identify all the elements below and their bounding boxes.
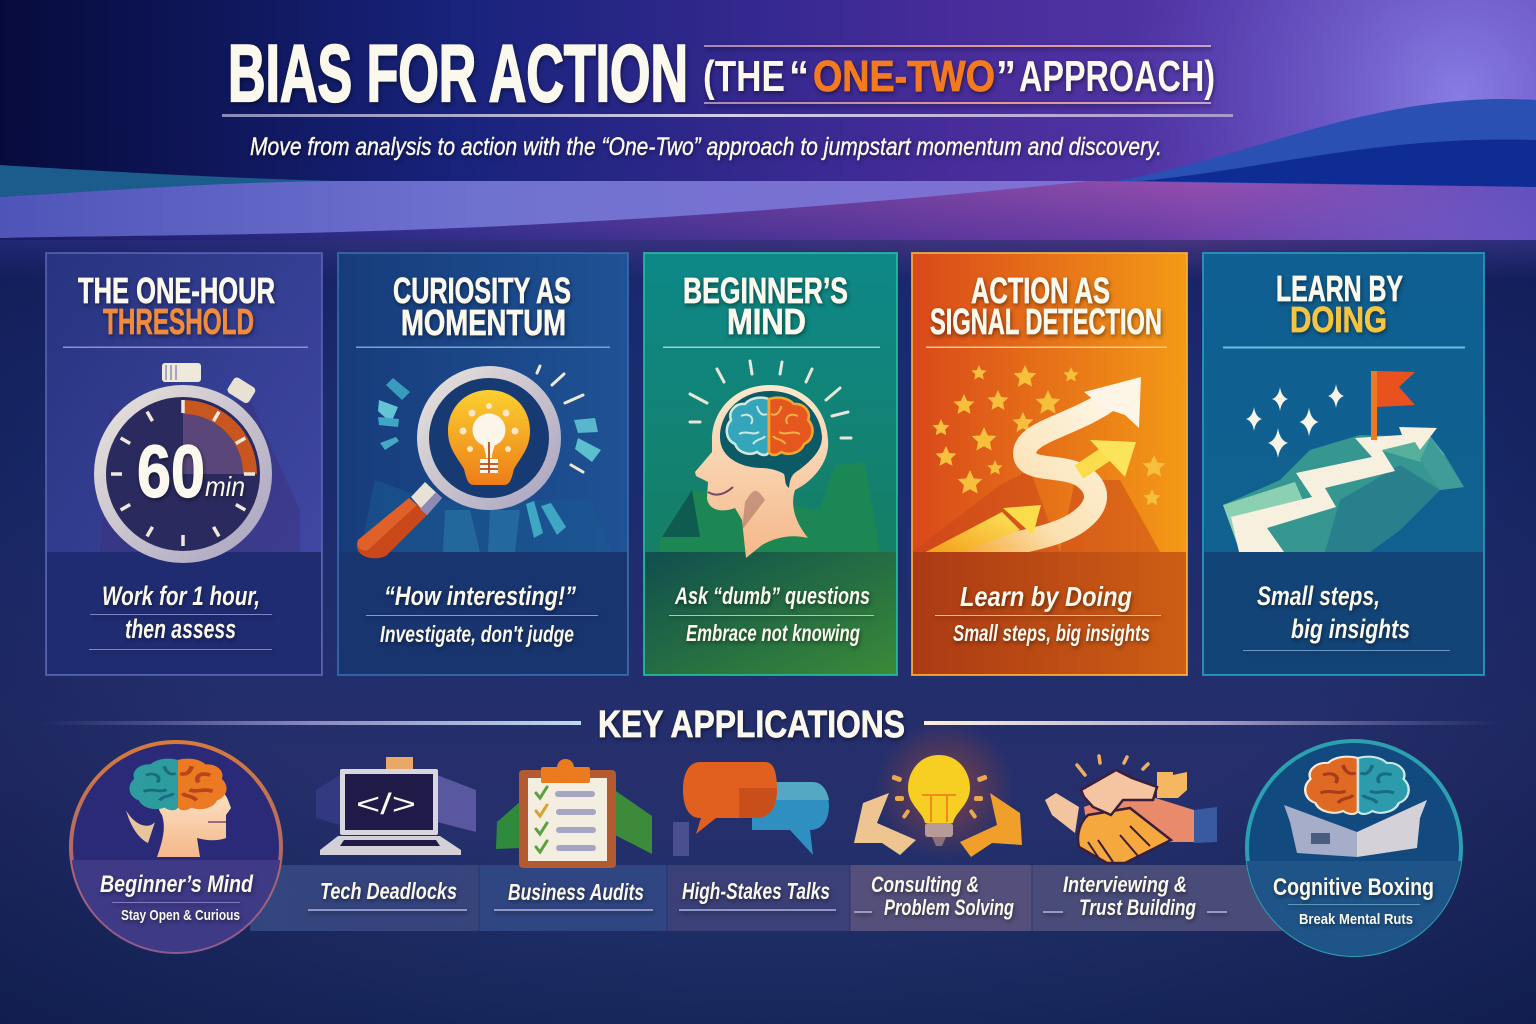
heading: DOING xyxy=(1290,299,1387,340)
caption: Learn by Doing xyxy=(960,581,1132,612)
icon: stopwatch: min xyxy=(205,471,245,502)
heading xyxy=(393,270,571,343)
heading: THE ONE-HOUR xyxy=(78,270,275,311)
icon: hands and light bulb xyxy=(854,720,1022,860)
icon: signals and rising arrows xyxy=(920,365,1165,562)
heading: BEGINNER’S xyxy=(683,270,848,311)
tagline: Move from analysis to action with the “One-Two” approach to jumpstart momentum and discovery. xyxy=(250,133,1162,161)
label: High-Stakes Talks xyxy=(682,878,830,904)
icon: mountain path and flag xyxy=(1223,371,1464,552)
icon: head with brain xyxy=(126,759,231,857)
heading: LEARN BY xyxy=(1276,268,1403,309)
application: beginner's mind badge xyxy=(68,742,284,960)
caption xyxy=(935,581,1161,646)
subtitle bracket: ONE-TWO xyxy=(813,52,995,101)
heading: CURIOSITY AS xyxy=(393,270,571,311)
label: Interviewing & xyxy=(1063,872,1187,897)
heading xyxy=(1276,268,1403,340)
caption xyxy=(89,581,272,650)
icon: magnifying glass with light bulb xyxy=(357,366,601,558)
label: Stay Open & Curious xyxy=(121,907,240,924)
application: high-stakes talks xyxy=(673,762,836,911)
caption: Embrace not knowing xyxy=(686,620,860,646)
heading: ACTION AS xyxy=(971,270,1110,311)
main heading: BIAS FOR ACTION xyxy=(228,29,688,119)
icon: stopwatch: 60 xyxy=(137,430,205,513)
caption: big insights xyxy=(1291,614,1410,644)
panel: beginner's mind xyxy=(644,253,897,675)
applications strip xyxy=(250,865,1290,931)
application: business audits xyxy=(494,759,653,911)
label xyxy=(1273,874,1434,928)
application: cognitive boxing badge xyxy=(1245,741,1463,961)
icon: handshake xyxy=(1045,756,1217,863)
icon: brain rising from box xyxy=(1284,757,1427,857)
subtitle bracket: ” xyxy=(996,52,1016,101)
caption: then assess xyxy=(125,614,236,644)
label: Business Audits xyxy=(508,879,644,905)
heading: key applications xyxy=(40,704,1502,746)
title xyxy=(222,29,1233,161)
icon: clipboard xyxy=(496,759,652,868)
heading: MOMENTUM xyxy=(401,302,566,343)
application: consulting and problem solving xyxy=(854,720,1022,920)
subtitle bracket xyxy=(703,45,1215,104)
heading: THRESHOLD xyxy=(103,301,254,342)
label: Cognitive Boxing xyxy=(1273,874,1434,901)
icon: speech bubbles xyxy=(673,762,829,856)
caption: Investigate, don't judge xyxy=(380,621,574,647)
panel: learn by doing xyxy=(1203,253,1484,675)
caption: Small steps, xyxy=(1257,581,1380,611)
label xyxy=(854,872,1014,920)
heading: SIGNAL DETECTION xyxy=(930,301,1162,342)
caption: Ask “dumb” questions xyxy=(674,583,870,610)
subtitle bracket: APPROACH) xyxy=(1019,52,1215,101)
subtitle bracket: “ xyxy=(789,52,809,101)
panel: the one-hour threshold xyxy=(46,253,322,675)
panel: curiosity as momentum xyxy=(338,253,628,675)
label: Consulting & xyxy=(871,872,979,897)
caption: Small steps, big insights xyxy=(953,620,1150,646)
icon: laptop xyxy=(316,757,476,855)
application: tech deadlocks xyxy=(308,757,476,911)
label: Break Mental Ruts xyxy=(1299,911,1413,928)
label xyxy=(100,871,254,924)
application: interviewing and trust building xyxy=(1043,756,1227,920)
label: Problem Solving xyxy=(884,895,1014,920)
caption xyxy=(669,583,874,646)
caption xyxy=(1243,581,1450,651)
heading: MIND xyxy=(727,301,806,342)
heading: key applications: KEY APPLICATIONS xyxy=(598,704,905,746)
icon: head with brain xyxy=(690,361,851,558)
label xyxy=(1043,872,1227,920)
label: Trust Building xyxy=(1079,895,1196,920)
subtitle bracket: (THE xyxy=(703,52,785,101)
heading xyxy=(78,270,275,342)
heading xyxy=(683,270,848,342)
caption: “How interesting!” xyxy=(384,581,576,611)
caption: Work for 1 hour, xyxy=(102,581,260,611)
caption xyxy=(366,581,598,647)
icon: laptop: </> xyxy=(356,788,416,821)
icon: stopwatch xyxy=(100,363,266,557)
label: Tech Deadlocks xyxy=(320,878,457,904)
label: Beginner’s Mind xyxy=(100,871,254,898)
heading xyxy=(930,270,1162,342)
panel: action as signal detection xyxy=(912,253,1187,675)
